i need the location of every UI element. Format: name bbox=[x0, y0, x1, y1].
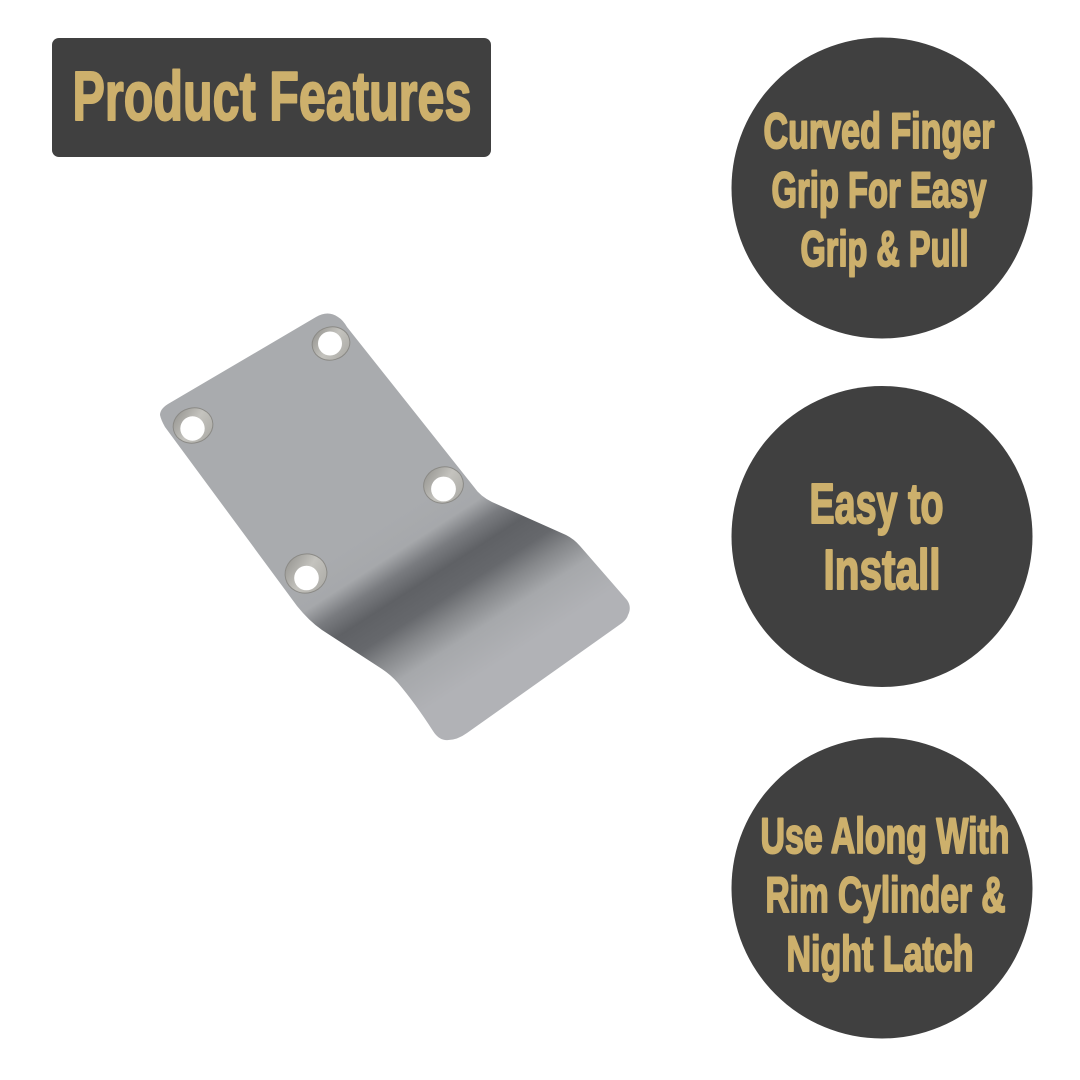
screw hole: top bbox=[308, 323, 354, 364]
feature badge: easy to install: Install bbox=[824, 538, 940, 602]
title text: Product Features bbox=[72, 57, 472, 135]
feature badge: rim cylinder and night latch: Night Latch bbox=[786, 926, 974, 982]
feature badge: curved finger grip: Grip & Pull bbox=[800, 221, 968, 277]
feature badge: easy to install bbox=[732, 386, 1032, 687]
screw hole: right bbox=[420, 462, 467, 508]
feature badge: rim cylinder and night latch bbox=[732, 738, 1032, 1038]
product photo: curved finger plate bbox=[160, 314, 630, 740]
feature badge: curved finger grip bbox=[732, 38, 1032, 338]
screw hole: bottom bbox=[281, 549, 331, 598]
feature badge: easy to install: Easy to bbox=[810, 472, 944, 536]
title banner bbox=[52, 38, 491, 157]
screw hole: left bbox=[169, 403, 217, 448]
